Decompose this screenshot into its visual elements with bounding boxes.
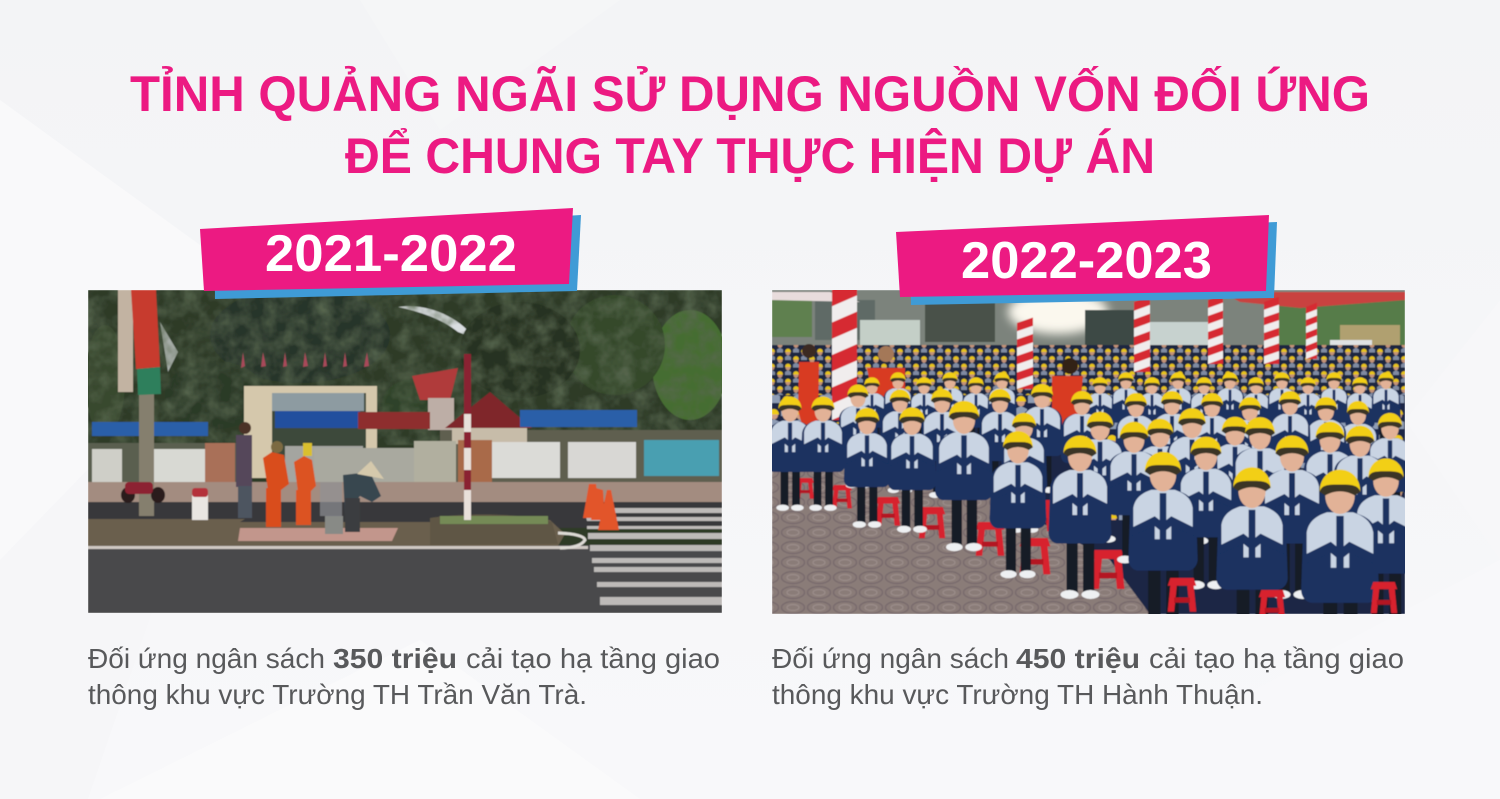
workers [236,422,384,534]
caption: 2021-2022: thông khu vực Trường TH Trần Văn Trà. [88,679,587,710]
school gate [244,386,377,484]
row of pupils behind the front row [861,371,1402,440]
foreground stools [1166,577,1398,614]
caption: 2022-2023 [772,643,1404,710]
photo: road works in front of Trần Văn Trà primary school [85,287,728,613]
striped post [464,354,471,520]
caption: 2022-2023: cải tạo hạ tầng giao [1149,643,1404,674]
traffic cones [583,484,619,530]
caption: 2022-2023: thông khu vực Trường TH Hành Thuận. [772,679,1263,710]
blue banners [92,410,637,436]
teachers in red ao dai [797,344,1084,426]
banner pole [118,290,161,516]
caption: 2021-2022: Đối ứng ngân sách [88,643,325,674]
white bollard [192,488,208,520]
photo: pupils in yellow helmets at Hành Thuận primary school [772,290,1405,614]
red plastic stools [799,477,1125,590]
striped columns [832,279,1317,420]
back rows of pupils [772,345,1405,520]
zebra crossing [585,508,722,605]
caption: 2021-2022: cải tạo hạ tầng giao [466,643,720,674]
red roof guard house [358,392,532,444]
title: TỈNH QUẢNG NGÃI SỬ DỤNG NGUỒN VỐN ĐỐI ỨNG [130,65,1370,122]
caption: 2022-2023: 450 triệu [1016,643,1140,674]
year tag 2022-2023 [896,215,1277,305]
title: ĐỂ CHUNG TAY THỰC HIỆN DỰ ÁN [345,128,1155,184]
year tag 2021-2022: 2021-2022 [265,225,517,283]
motorbike [121,482,165,503]
caption: 2021-2022 [88,643,720,710]
front row pupils [772,396,1405,614]
title [130,65,1370,184]
year tag 2021-2022 [200,208,581,299]
year tag 2022-2023: 2022-2023 [961,232,1212,290]
paved floor [772,462,1150,614]
caption: 2022-2023: Đối ứng ngân sách [772,643,1009,674]
caption: 2021-2022: 350 triệu [333,643,457,674]
pavement and roads [88,482,722,613]
middle row pupils [838,383,1405,545]
fence and information boards [92,440,719,485]
